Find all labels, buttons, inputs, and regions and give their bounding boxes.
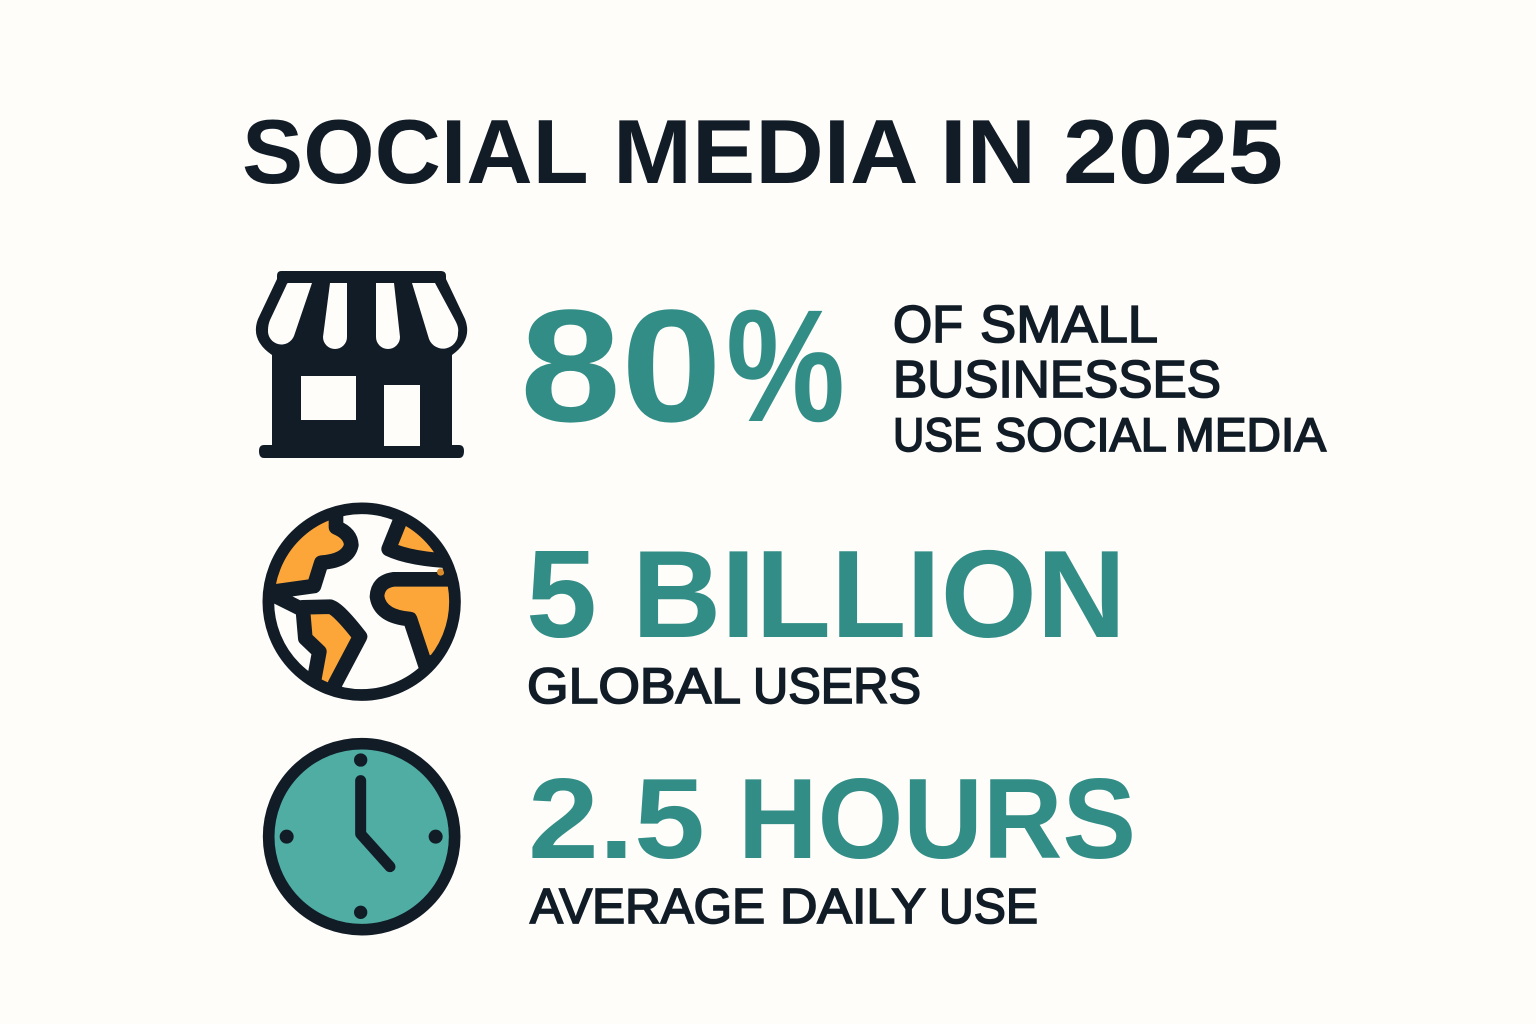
description: of small businesses use social media: SMALL [980,296,1158,354]
title: 2025 [1063,102,1283,203]
stat: 5 billion: 5 [526,526,597,664]
stat row: daily use [269,744,1136,934]
description: global users: GLOBAL [527,658,740,714]
stat: 5 billion: BILLION [632,526,1126,664]
stat row: small businesses [256,271,1327,461]
description: of small businesses use social media: USE [893,408,982,461]
description: average daily use: AVERAGE [530,880,765,934]
stat: 2.5 hours: HOURS [738,756,1136,883]
description: of small businesses use social media: BUSINESSES [893,351,1221,409]
description: of small businesses use social media: OF [893,296,963,354]
stat: 80%: 80 [520,276,722,455]
icon: globe [263,503,463,697]
stat: 2.5 hours: 2.5 [528,756,705,883]
description: of small businesses use social media [893,296,1327,461]
description: global users: USERS [753,658,921,714]
title: SOCIAL [242,102,587,203]
title: MEDIA [613,102,917,203]
description: average daily use: DAILY [780,880,925,934]
stat: 80%: % [726,276,845,455]
title: IN [940,102,1036,203]
description: of small businesses use social media: MEDIA [1175,408,1327,461]
icon: clock [269,744,455,930]
description: of small businesses use social media: SOCIAL [995,408,1166,461]
description: average daily use: USE [939,880,1038,934]
stat row: global users [263,503,1126,714]
icon: storefront [256,271,467,458]
